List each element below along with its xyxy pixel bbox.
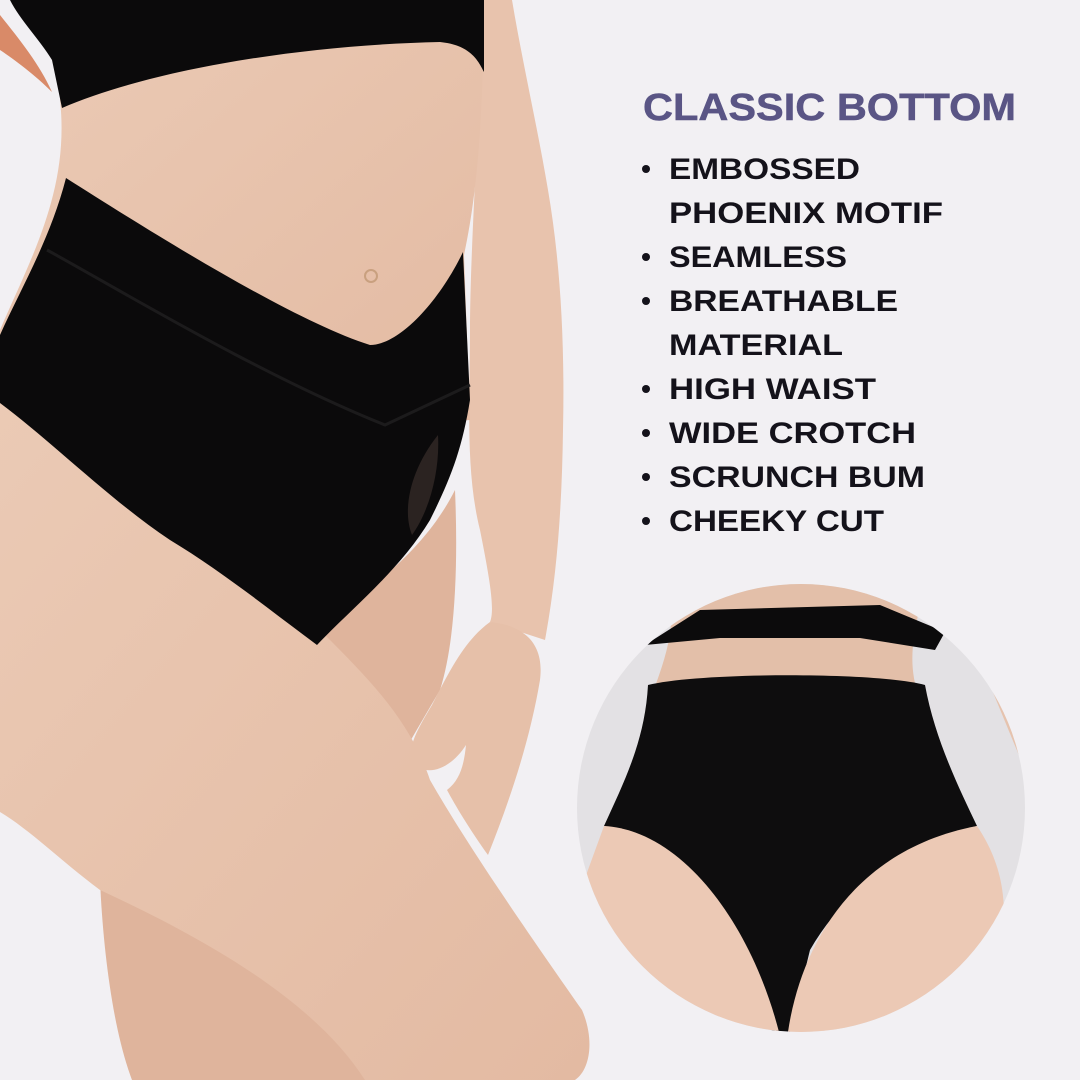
embossed phoenix motif (408, 435, 438, 535)
item: breathable material (642, 285, 898, 362)
item: breathable material: MATERIAL (669, 329, 843, 362)
waistband fold (47, 250, 470, 425)
hair (0, 15, 52, 92)
item: scrunch bum: SCRUNCH BUM (669, 461, 925, 494)
hand over thigh (411, 622, 541, 855)
side arm (993, 693, 1018, 754)
top strap (645, 605, 945, 650)
top (10, 0, 484, 108)
item: embossed phoenix motif: EMBOSSED (669, 153, 860, 186)
item: high waist: HIGH WAIST (669, 373, 876, 406)
black brief (0, 178, 470, 645)
arm (469, 0, 563, 640)
item: seamless: SEAMLESS (669, 241, 847, 274)
item: cheeky cut: CHEEKY CUT (669, 505, 884, 538)
torso (0, 25, 484, 440)
feature list (642, 153, 943, 538)
shorts (604, 675, 977, 1032)
navel piercing (365, 270, 377, 282)
front thigh (0, 390, 589, 1080)
item: embossed phoenix motif: PHOENIX MOTIF (669, 197, 943, 230)
main product photo: model wearing black high-waist bottom (0, 0, 589, 1080)
inset background (577, 617, 1025, 962)
circular inset: rear view of the bottom (577, 584, 1025, 1032)
lower rear leg (100, 880, 370, 1080)
rear leg (300, 490, 456, 760)
item: embossed phoenix motif (642, 153, 943, 230)
left cheek (577, 826, 779, 1032)
back and upper body (656, 584, 918, 684)
right cheek (788, 826, 1004, 1032)
item: wide crotch: WIDE CROTCH (669, 417, 916, 450)
title: CLASSIC BOTTOM (643, 87, 1016, 129)
item: breathable material: BREATHABLE (669, 285, 898, 318)
